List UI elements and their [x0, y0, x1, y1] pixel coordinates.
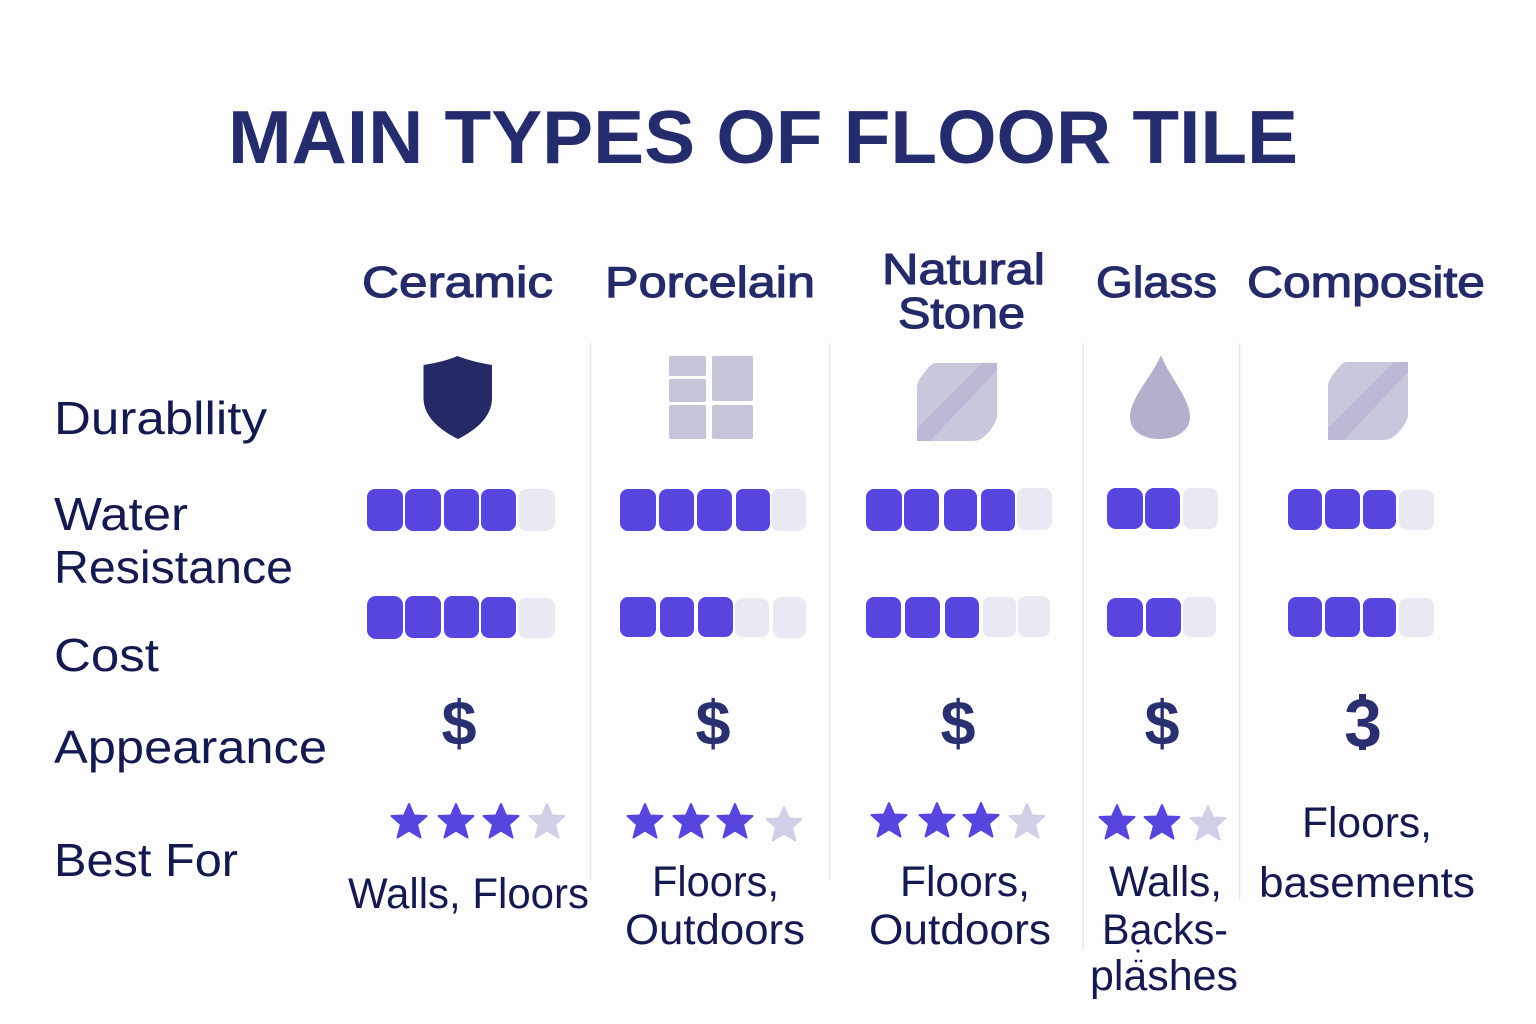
rating bar: glass cost	[1107, 597, 1216, 637]
label: Durability: Durabllity	[54, 392, 267, 444]
best for: composite: Floors,	[1302, 799, 1432, 847]
rating bar: ceramic water resistance	[367, 489, 555, 531]
label: Cost: Cost	[54, 629, 159, 681]
label: Water Resistance: Water	[54, 488, 188, 540]
star rating: glass	[1100, 805, 1226, 840]
icon: glass drop	[1130, 355, 1190, 439]
best for: natural stone: Outdoors	[869, 906, 1051, 954]
best for: glass	[1090, 858, 1238, 1000]
row labels	[54, 392, 327, 886]
icon: shield	[424, 356, 492, 439]
header: Natural Stone: Natural	[882, 245, 1045, 294]
column headers	[362, 245, 1485, 338]
header: Natural Stone: Stone	[898, 289, 1025, 338]
rating bar: porcelain water resistance	[620, 489, 806, 531]
star rating: natural stone	[872, 803, 1044, 838]
icon: tile grid	[669, 356, 753, 439]
cost symbol: porcelain: $	[695, 689, 731, 759]
header: Glass: Glass	[1096, 258, 1217, 307]
header: Natural Stone	[882, 245, 1045, 338]
star rating: ceramic	[392, 804, 564, 838]
label: Water Resistance	[54, 488, 293, 593]
header: Ceramic: Ceramic	[362, 258, 553, 307]
best for: natural stone	[869, 858, 1051, 954]
title: MAIN TYPES OF FLOOR TILE	[228, 95, 1298, 179]
best for: composite: basements	[1259, 859, 1475, 907]
rating bar: natural stone water resistance	[866, 488, 1052, 531]
best for: glass: plashes	[1090, 952, 1238, 1000]
header: Porcelain: Porcelain	[605, 258, 815, 307]
rating bar: composite cost	[1288, 597, 1434, 637]
rating bar: glass water resistance	[1107, 488, 1218, 529]
label: Water Resistance: Resistance	[54, 541, 293, 593]
best for: glass: Backs-	[1102, 906, 1228, 954]
rating bar: ceramic cost	[367, 596, 555, 639]
cost symbol: composite: 3	[1344, 685, 1382, 761]
rating bar: natural stone cost	[866, 596, 1050, 638]
header: Composite: Composite	[1247, 258, 1485, 307]
icon: composite tile	[1328, 362, 1408, 440]
best for: ceramic: Walls, Floors	[348, 870, 589, 918]
best for: porcelain: Outdoors	[625, 906, 805, 954]
rating bar: porcelain cost	[620, 597, 806, 638]
best for: natural stone: Floors,	[900, 858, 1030, 906]
cost symbol: glass: $	[1144, 689, 1180, 759]
cost symbol: ceramic: $	[441, 689, 477, 759]
best for: porcelain: Floors,	[652, 858, 779, 906]
best for: composite	[1259, 799, 1475, 907]
label: Best For: Best For	[54, 834, 238, 886]
cost symbol: natural stone: $	[940, 689, 976, 759]
rating bar: composite water resistance	[1288, 489, 1434, 530]
icon: natural stone tile	[917, 363, 997, 441]
best for: glass: Walls,	[1109, 858, 1222, 906]
star rating: porcelain	[628, 804, 802, 840]
best for: porcelain	[625, 858, 805, 954]
label: Appearance: Appearance	[54, 721, 327, 773]
